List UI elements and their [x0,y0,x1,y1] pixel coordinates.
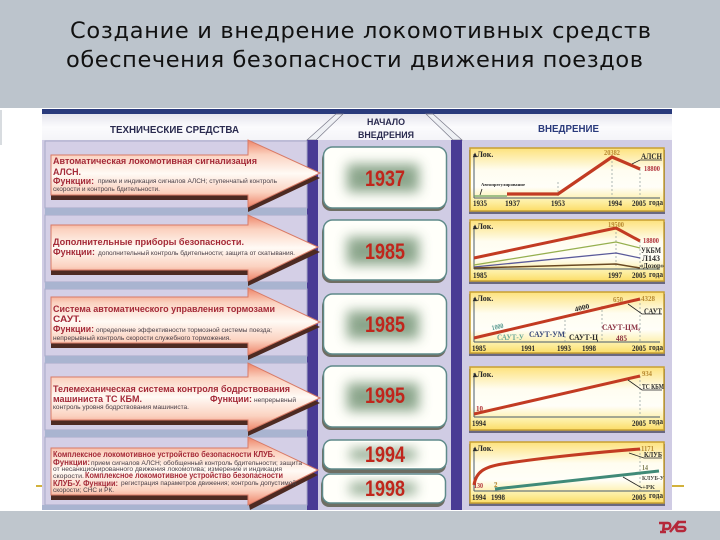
chart: SAUT: 1998 [582,344,596,353]
heading: start of deployment: НАЧАЛО [367,117,405,127]
panel: SAUT arrow: определение эффективности тормозной системы поезда; [96,327,272,334]
chart: ALSN: 18800 [644,165,660,173]
chart: TS KBM: 934 [642,370,652,378]
chart: TS KBM: 2005 [632,419,646,428]
poster background [42,109,672,510]
year box 1995 [322,366,446,430]
chart: SAUT: 4328 [641,295,656,303]
bevel between heading sections [307,114,462,140]
chart: ALSN: АЛСН [641,152,663,161]
panel: TS KBM arrow: контроль уровня бодрствования машиниста. [53,405,189,411]
row gaps [42,208,307,510]
chart: ALSN: 1953 [551,199,565,208]
chart: KLUB [469,442,665,506]
panel: ALSN arrow: прием и индикация сигналов АЛСН; ступенчатый контроль [98,178,277,185]
panel: TS KBM arrow: непрерывный [254,397,296,404]
title: Создание и внедрение локомотивных средств [70,18,651,44]
chart: SAUT: 4000 [574,302,591,314]
panels: left column backgrounds [45,141,307,505]
panel: extra devices arrow: Функции: [53,247,95,258]
title [66,18,651,73]
chart: SAUT: 485 [616,334,627,343]
chart: SAUT: 1000 [491,322,505,332]
chart: ALSN: 2005 [632,199,646,208]
chart: SAUT: САУТ-Ц [569,333,599,342]
year box 1998 [321,474,446,507]
icon: RZD logo [659,521,686,532]
panel: ALSN arrow: АЛСН. [53,167,81,178]
main poster [42,109,672,510]
chart: KLUB: КЛУБ-У [642,475,664,482]
chart: SAUT: 1991 [521,344,535,353]
chart: KLUB: 1994 [472,493,486,502]
chart: TS KBM [469,367,665,433]
chart: KLUB: +РК [642,484,655,491]
chart: SAUT: 1993 [557,344,571,353]
chart: extra devices: 1985 [473,271,487,280]
chart: SAUT [469,292,665,356]
chart: extra devices: 19500 [608,221,624,229]
panel: KLUB arrow: от несанкционированного движения локомотива; измерение и индикация [53,467,282,473]
chart: ALSN: 1935 [473,199,487,208]
chart: KLUB: 1171 [641,445,654,453]
chart: extra devices [469,220,665,284]
chart: SAUT: 650 [613,296,623,304]
panel: ALSN arrow: Автоматическая локомотивная сигнализация [53,156,257,167]
heading: start of deployment: ВНЕДРЕНИЯ [358,130,414,140]
panel: KLUB arrow: прием сигналов АЛСН; обобщенный контроль бдительности; защита [91,460,303,467]
panel: SAUT arrow: непрерывный контроль скорости служебного торможения. [53,335,231,342]
chart: extra devices: 1997 [608,271,622,280]
year box 1937 [322,147,446,211]
header band [0,0,720,108]
chart: ALSN: Автопрегулирование [481,182,525,187]
panel: extra devices arrow [51,215,320,286]
chart: SAUT: 2005 [632,344,646,353]
chart: extra devices: 2005 [632,271,646,280]
panel: extra devices arrow: дополнительный контроль бдительности; защита от скатывания. [98,250,295,257]
chart: ALSN: 1994 [608,199,622,208]
chart: KLUB: 130 [474,482,483,490]
chart: extra devices: «Дозор» [640,262,664,270]
footer band [0,511,720,540]
chart: KLUB: года [649,491,663,500]
year box 1937: 1937 [365,166,405,191]
chart: TS KBM: 1994 [472,419,486,428]
year box 1994: 1994 [365,442,406,467]
chart: extra devices: ▴Лок. [472,222,493,231]
chart: SAUT: ▴Лок. [472,294,493,303]
year box 1995: 1995 [365,383,405,408]
chart: TS KBM: 10 [476,405,484,413]
panel: SAUT arrow [51,288,320,360]
panel: ALSN arrow: Функции: [53,176,94,187]
chart: extra devices: года [649,270,663,279]
panel: KLUB arrow [51,437,318,510]
chart: SAUT: САУТ [644,307,663,316]
chart: SAUT: САУТ-У [497,333,524,342]
panel: KLUB arrow: скорости. [53,474,84,480]
panel: KLUB arrow: Функции: [53,458,90,467]
chart: ALSN: года [649,198,663,207]
chart: KLUB: 1998 [491,493,505,502]
chart: extra devices: 18800 [643,237,659,245]
chart: ALSN: 1937 [505,199,520,208]
chart: TS KBM: ТС КБМ [642,383,664,391]
year box 1994 [322,440,446,473]
panel: SAUT arrow: Функции: [53,324,94,335]
chart: SAUT: 1985 [472,344,486,353]
heading strip [42,114,672,140]
year box 1985 second [322,294,446,357]
heading: technical means: ТЕХНИЧЕСКИЕ СРЕДСТВА [110,124,239,136]
panel: TS KBM arrow: Функции: [210,394,252,405]
chart: KLUB: 2005 [632,493,646,502]
heading: start of deployment [358,117,414,140]
chart: ALSN: ▴Лок. [472,150,493,159]
panel: KLUB arrow: КЛУБ-У. Функции: [53,479,118,488]
panel: TS KBM arrow: машиниста ТС КБМ. [53,394,142,405]
year box 1985 [322,220,446,283]
chart: SAUT: САУТ-УМ [529,330,565,339]
chart: TS KBM: ▴Лок. [472,370,493,379]
chart: extra devices: УКБМ [641,246,661,255]
panel: KLUB arrow: Комплексное локомотивное устройство безопасности [85,471,283,480]
chart: SAUT: года [649,343,663,352]
left edge mark [0,110,2,145]
title: обеспечения безопасности движения поездов [66,47,643,73]
year box 1985 second: 1985 [365,312,405,337]
panel: extra devices arrow: Дополнительные приборы безопасности. [53,237,244,248]
panel: ALSN arrow [51,140,320,212]
chart: KLUB: 14 [642,464,648,472]
panel: KLUB arrow: скорости; СНС и РК. [53,488,114,494]
panel: KLUB arrow: регистрация параметров движения; контроль допустимой [121,480,296,487]
chart: ALSN [469,148,665,214]
gold rule right [671,485,684,487]
year box 1985: 1985 [365,239,405,264]
chart: TS KBM: года [649,417,663,426]
panel: SAUT arrow: САУТ. [53,314,81,325]
panel: SAUT arrow: Система автоматического управления тормозами [53,304,275,315]
top navy strip [42,109,672,114]
panel: ALSN arrow: скорости и контроль бдительности. [53,187,160,193]
chart: extra devices: Л143 [642,254,660,263]
year box 1998: 1998 [365,476,405,501]
heading: deployment: ВНЕДРЕНИЕ [538,123,599,135]
chart: KLUB: КЛУБ [644,451,662,459]
chart: KLUB: ▴Лок. [472,444,493,453]
navy column left [307,140,318,510]
navy column right [451,140,462,510]
panel: KLUB arrow: Комплексное локомотивное устройство безопасности КЛУБ. [53,450,275,459]
chart: KLUB: 2 [494,481,498,489]
panel: TS KBM arrow: Телемеханическая система контроля бодрствования [53,384,290,395]
gold rule left [36,485,43,487]
chart: ALSN: 20382 [604,149,620,157]
panel: TS KBM arrow [51,363,320,436]
chart: SAUT: САУТ-ЦМ, [602,323,640,332]
